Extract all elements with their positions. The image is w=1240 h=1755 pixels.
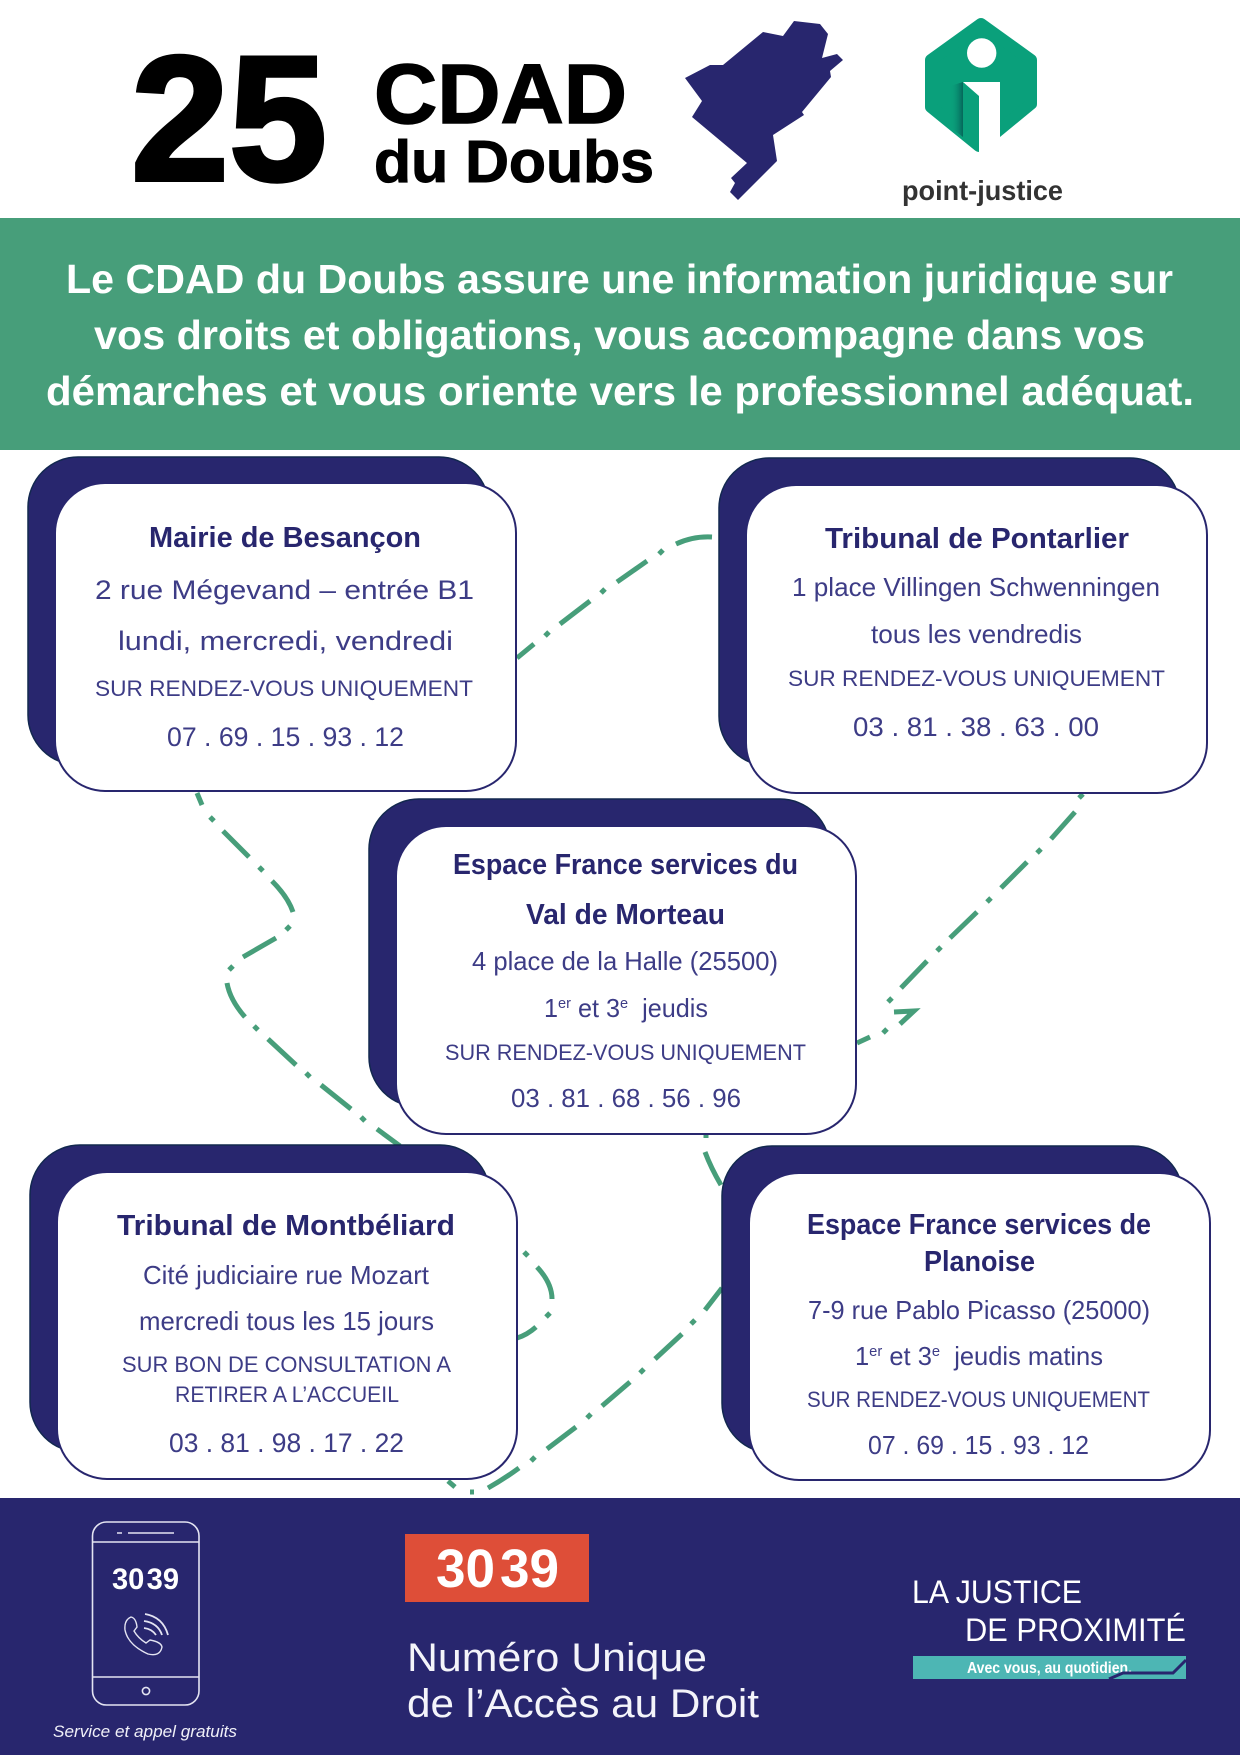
panel: Tribunal de Montbéliard: [30, 1145, 517, 1479]
footer band: [0, 1498, 1240, 1755]
red badge 3039: [405, 1534, 589, 1602]
connector: Planoise to Montbéliard: [448, 1288, 722, 1492]
header: department title: [131, 19, 654, 218]
appointment note: SUR RENDEZ-VOUS UNIQUEMENT: [95, 676, 473, 701]
card title: Mairie de Besançon: [149, 522, 421, 554]
opening days: e: [620, 995, 628, 1012]
address: 7-9 rue Pablo Picasso (25000): [808, 1295, 1150, 1325]
phone number: 03 . 81 . 98 . 17 . 22: [169, 1428, 404, 1458]
banner: mission statement: [0, 218, 1240, 450]
banner line 2: vos droits et obligations, vous accompagne dans vos: [94, 312, 1145, 358]
connector: Besançon to Montbéliard: [197, 793, 400, 1146]
icon: map of the Doubs department: [685, 21, 843, 200]
panel: Mairie de Besançon: [28, 457, 516, 791]
card title: Tribunal de Pontarlier: [825, 523, 1129, 555]
opening days: jeudis matins: [940, 1341, 1103, 1371]
icon: handset with signal waves: [125, 1614, 168, 1655]
icon: green hexagon: [931, 24, 1031, 146]
opening days: er: [558, 995, 571, 1012]
connector: Val de Morteau to Planoise: [705, 1134, 721, 1185]
icon: smartphone with 3039: [92, 1522, 199, 1705]
opening days: mercredi tous les 15 jours: [139, 1306, 434, 1336]
title CDAD: CDAD: [374, 47, 627, 141]
phone number: 03 . 81 . 68 . 56 . 96: [511, 1083, 741, 1113]
card title line 1: Espace France services de: [807, 1209, 1151, 1241]
icon: white dot of the i: [967, 38, 996, 68]
opening days: lundi, mercredi, vendredi: [118, 626, 453, 656]
phone number on screen: 30 39: [112, 1563, 179, 1596]
panel: Tribunal de Pontarlier: [719, 458, 1207, 793]
logo: La Justice de Proximité: DE PROXIMITÉ: [965, 1612, 1186, 1648]
department number 25: 25: [131, 19, 327, 218]
red badge 3039: 30 39: [436, 1539, 559, 1599]
appointment note: SUR RENDEZ-VOUS UNIQUEMENT: [445, 1040, 806, 1065]
opening days: 1: [855, 1341, 869, 1371]
logo wordmark: point-justice: [902, 175, 1063, 206]
phone number: 07 . 69 . 15 . 93 . 12: [868, 1430, 1089, 1460]
address: 2 rue Mégevand – entrée B1: [95, 575, 474, 605]
appointment note: SUR RENDEZ-VOUS UNIQUEMENT: [788, 666, 1165, 691]
opening days: 1: [544, 993, 558, 1023]
consultation note line 1: SUR BON DE CONSULTATION A: [122, 1352, 451, 1377]
card title line 2: Planoise: [924, 1246, 1035, 1278]
appointment note: SUR RENDEZ-VOUS UNIQUEMENT: [807, 1387, 1150, 1412]
consultation note line 2: RETIRER A L’ACCUEIL: [175, 1382, 399, 1407]
card title line 2: Val de Morteau: [526, 899, 725, 931]
phone number: 07 . 69 . 15 . 93 . 12: [167, 722, 404, 752]
logo: La Justice de Proximité: [912, 1574, 1186, 1679]
panel: Espace France services du Val de Morteau: [369, 799, 856, 1134]
logo: point-justice: [902, 24, 1063, 206]
opening days: er: [869, 1343, 882, 1360]
connector: Pontarlier to Val de Morteau with arrow: [857, 794, 1083, 1043]
banner line 3: démarches et vous oriente vers le professionnel adéquat.: [46, 368, 1194, 414]
caption: free service: Service et appel gratuits: [53, 1723, 237, 1741]
title du Doubs: du Doubs: [374, 129, 654, 195]
card title line 1: Espace France services du: [453, 849, 798, 881]
opening days: tous les vendredis: [871, 619, 1082, 649]
logo: La Justice de Proximité: Avec vous, au quotidien.: [967, 1660, 1132, 1677]
icon: white stem of the i: [963, 82, 1045, 160]
address: 4 place de la Halle (25500): [472, 946, 778, 976]
opening days: et 3: [571, 993, 620, 1023]
text: de l'Accès au Droit: de l’Accès au Droit: [407, 1682, 759, 1726]
opening days: et 3: [882, 1341, 932, 1371]
address: Cité judiciaire rue Mozart: [143, 1260, 430, 1290]
address: 1 place Villingen Schwenningen: [792, 572, 1160, 602]
connector: Besançon to Pontarlier: [517, 537, 712, 658]
text: Numéro Unique: Numéro Unique: [407, 1636, 707, 1680]
panel: Espace France services de Planoise: [722, 1146, 1210, 1480]
opening days: e: [932, 1343, 940, 1360]
opening days: jeudis: [628, 993, 708, 1023]
banner line 1: Le CDAD du Doubs assure une information juridique sur: [66, 256, 1173, 302]
icon: fold shadow: [950, 82, 963, 137]
connector: Montbéliard loop: [517, 1252, 552, 1338]
logo: La Justice de Proximité: LA JUSTICE: [912, 1574, 1082, 1610]
card title: Tribunal de Montbéliard: [117, 1210, 455, 1242]
phone number: 03 . 81 . 38 . 63 . 00: [853, 712, 1099, 742]
